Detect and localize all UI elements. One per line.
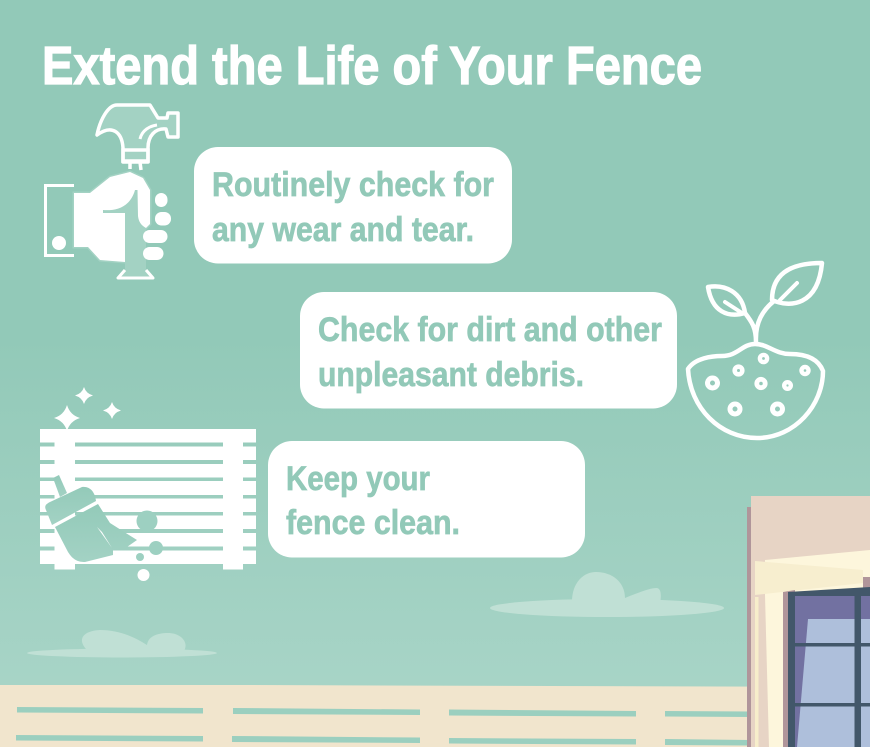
hand fist [74, 172, 150, 262]
fence boards [0, 685, 870, 747]
building with window [747, 496, 870, 747]
hammer claw lines [140, 125, 157, 139]
fence slats [40, 429, 256, 564]
background fence [0, 685, 870, 747]
panel: dirt and debris [300, 292, 677, 408]
wall [751, 496, 870, 747]
soil pebbles [708, 355, 808, 414]
stem [745, 301, 774, 342]
trim left [755, 597, 758, 747]
brush slit [97, 527, 112, 548]
panel: keep clean [268, 441, 585, 558]
window reflection [797, 619, 854, 747]
lintel light [765, 550, 870, 596]
trim light [765, 592, 783, 747]
window mullions [795, 643, 870, 646]
icon: hand holding hammer [46, 105, 178, 278]
bubble [300, 292, 677, 408]
cloud left [27, 630, 217, 658]
soil mound [688, 344, 823, 438]
brush [45, 475, 137, 562]
hammer collar [123, 150, 148, 170]
right leaf [772, 263, 822, 304]
window frame [788, 587, 870, 747]
dust spots [136, 510, 158, 532]
shirt cuff [46, 186, 74, 256]
lintel shaded [755, 561, 863, 595]
cuff button [52, 236, 66, 250]
window panes [795, 596, 854, 747]
hammer head [97, 105, 178, 162]
icon: seedling in soil [688, 263, 823, 438]
shadow under lintel [783, 577, 870, 747]
sparkles [54, 387, 121, 431]
handle flare [118, 270, 153, 278]
panel: wear and tear: any wear and tear. [212, 211, 474, 249]
wall shadow [747, 507, 752, 747]
icon: fence being brushed clean [40, 387, 256, 581]
cloud right [490, 572, 724, 617]
hammer handle [103, 190, 146, 270]
panel: dirt and debris: unpleasant debris. [318, 356, 584, 394]
left leaf [708, 286, 745, 315]
bubble text: Keep your [286, 460, 430, 498]
panel: wear and tear [194, 147, 512, 264]
title: Extend the Life of Your Fence [42, 36, 702, 96]
fence posts [54, 429, 243, 570]
fence gaps [16, 707, 750, 746]
bubble [194, 147, 512, 264]
bubble text: Check for dirt and other [318, 311, 662, 349]
bubble [268, 441, 585, 558]
panel: keep clean: fence clean. [286, 504, 460, 542]
bubble text: Routinely check for [212, 166, 494, 204]
fingers [143, 193, 171, 260]
